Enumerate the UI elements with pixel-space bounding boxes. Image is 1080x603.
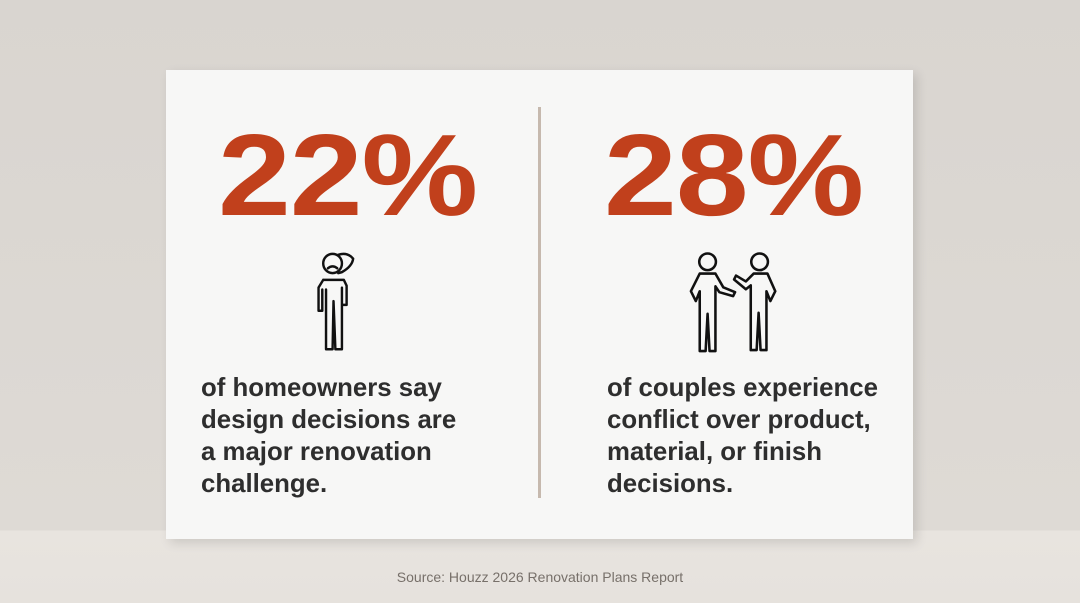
text: homeowners: of homeowners say design decisions are a major renovation challenge. [201, 374, 456, 498]
icon: worried person [317, 252, 354, 350]
divider [538, 107, 541, 498]
source: Source: Houzz 2026 Renovation Plans Report [397, 569, 683, 585]
stat: 28%: 28% [604, 110, 863, 240]
icon: two people arguing [690, 252, 777, 352]
stat: 22%: 22% [218, 110, 477, 240]
text: couples: of couples experience conflict over product, material, or finish decisions. [607, 374, 878, 498]
card [166, 70, 913, 539]
